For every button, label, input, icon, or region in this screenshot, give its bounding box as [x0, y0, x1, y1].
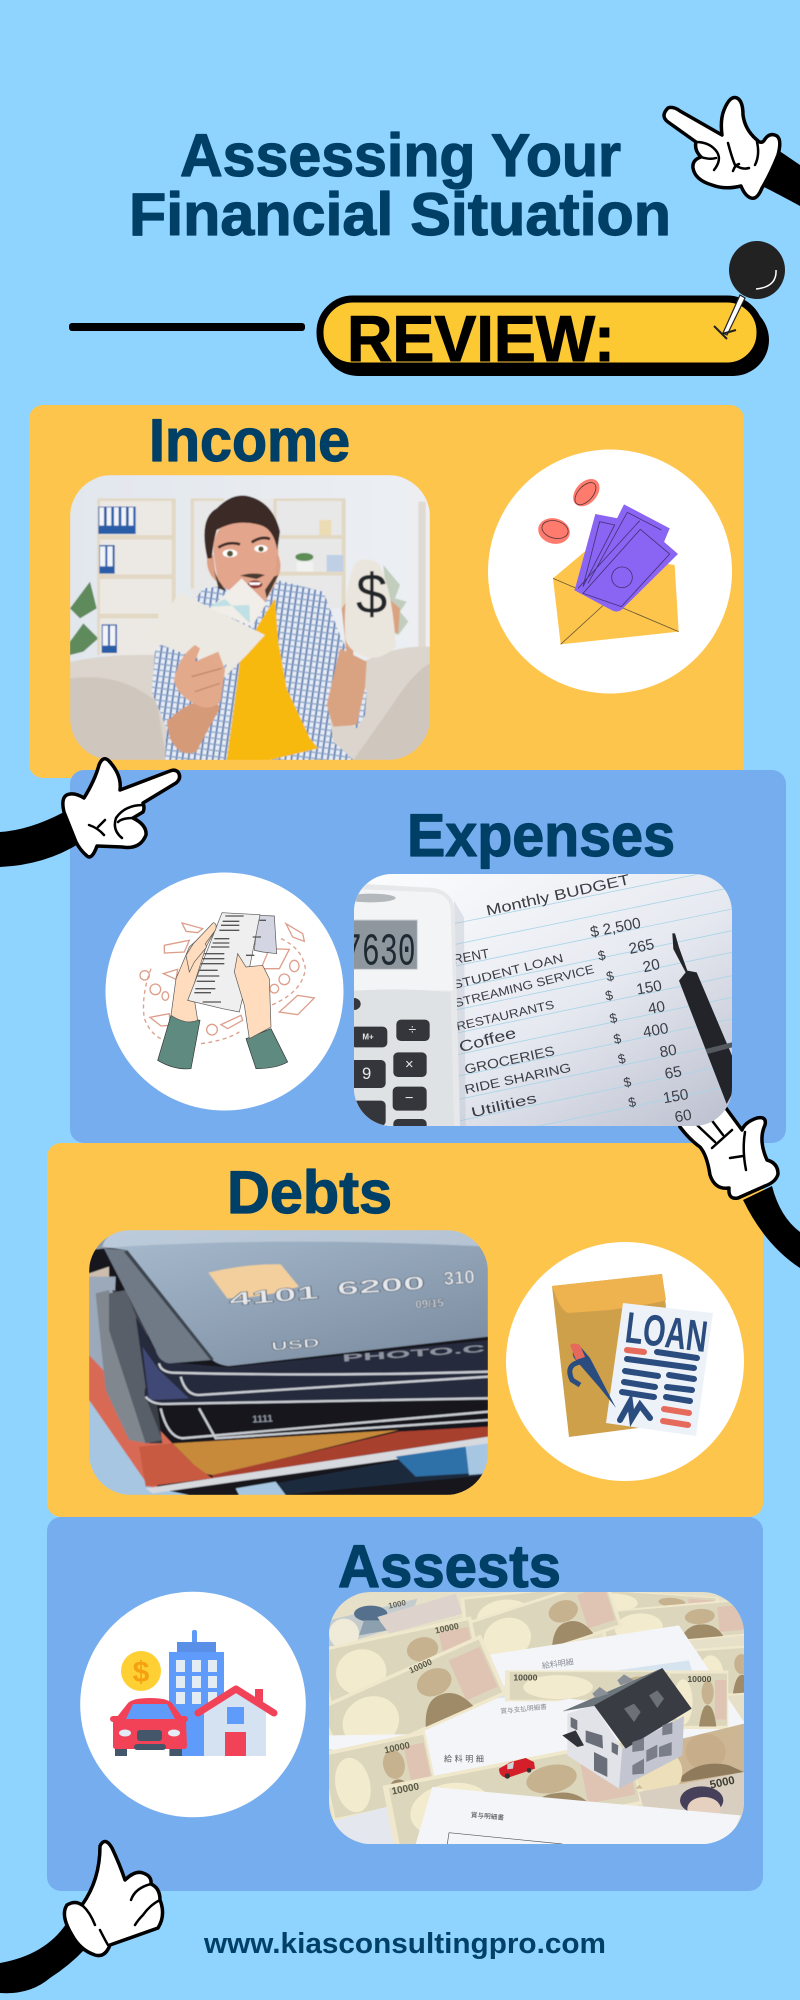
panel: debts [47, 1143, 763, 1517]
photo: yen banknotes with model house: 10000 [407, 1656, 434, 1675]
photo: monthly budget with calculator and pen: 150 [662, 1086, 690, 1107]
icon circle and loan document [506, 1242, 744, 1481]
heading: debts: Debts [227, 1159, 392, 1226]
photo: monthly budget with calculator and pen: $ [608, 1010, 619, 1026]
hand on envelope [174, 645, 225, 708]
photo: yen banknotes with model house: 10000 [383, 1740, 411, 1755]
photo: monthly budget with calculator and pen: Coffee [457, 1025, 518, 1056]
photo: yen banknotes with model house: 給料明細 [444, 1753, 487, 1764]
photo: monthly budget with calculator and pen: RENT [452, 946, 490, 967]
photo: yen banknotes with model house [329, 1592, 744, 1844]
photo: monthly budget with calculator and pen: Utilities [469, 1090, 538, 1120]
photo: monthly budget with calculator and pen: 400 [642, 1020, 670, 1041]
panel: expenses [70, 770, 786, 1143]
photo: monthly budget with calculator and pen: RESTAURANTS [455, 997, 555, 1034]
icon: assets building car house [80, 1592, 306, 1817]
photo: monthly budget with calculator and pen: ÷ [408, 1021, 416, 1037]
photo: monthly budget with calculator and pen: 7630 [344, 928, 416, 979]
photo: monthly budget with calculator and pen: $ [597, 947, 607, 964]
photo: man with bills and money bag: $ [356, 563, 387, 626]
photo: monthly budget with calculator and pen: 40 [647, 998, 666, 1018]
photo: monthly budget with calculator and pen: 65 [663, 1063, 683, 1083]
photo: monthly budget with calculator and pen: × [405, 1057, 414, 1073]
photo: yen banknotes with model house: 給料明細 [541, 1656, 574, 1672]
photo: yen banknotes with model house: 賞与明細書 [470, 1809, 505, 1822]
photo: stack of credit cards: 1111 [252, 1414, 273, 1426]
heading: income: Income [149, 407, 350, 474]
review banner: REVIEW: [347, 302, 615, 375]
photo: monthly budget with calculator and pen: $ 2,500 [589, 915, 642, 941]
icon: receipt in hands [106, 872, 344, 1110]
photo: yen banknotes with model house: 10000 [687, 1674, 712, 1684]
photo: yen banknotes with model house: 5000 [709, 1775, 736, 1792]
photo: stack of credit cards [89, 1230, 488, 1495]
photo: yen banknotes with model house: 10000 [391, 1781, 421, 1798]
photo: monthly budget with calculator and pen: 150 [635, 977, 663, 999]
photo: monthly budget with calculator and pen: $ [617, 1051, 627, 1067]
photo: monthly budget with calculator and pen: STREAMING SERVICE [453, 962, 595, 1010]
t-shirt [227, 598, 318, 760]
photo: monthly budget with calculator and pen [354, 874, 732, 1126]
face [204, 496, 281, 605]
photo: stack of credit cards: USD [271, 1335, 321, 1354]
title [129, 122, 671, 248]
envelope [160, 593, 266, 678]
panel: assets [47, 1517, 763, 1891]
photo: monthly budget with calculator and pen: 80 [658, 1042, 678, 1061]
icon: thumbs up hand [0, 1841, 163, 1993]
photo: stack of credit cards: 4101 [228, 1281, 320, 1310]
shirt [152, 580, 367, 760]
icon: assets building car house: $ [133, 1656, 150, 1689]
icon: pointing hand right [680, 1100, 800, 1268]
photo: monthly budget with calculator and pen: 265 [627, 936, 656, 958]
photo: monthly budget with calculator and pen: M+ [362, 1033, 374, 1042]
money bag [345, 559, 396, 658]
icon: pointing hand top right [664, 98, 800, 206]
photo: yen banknotes with model house: 1000 [388, 1598, 407, 1611]
icon circle and loan document: LOAN [623, 1303, 710, 1362]
photo: stack of credit cards: 6200 [336, 1272, 426, 1299]
photo: monthly budget with calculator and pen: $ [622, 1074, 633, 1090]
photo: monthly budget with calculator and pen: $ [605, 968, 616, 984]
photo: monthly budget with calculator and pen: $ [612, 1031, 623, 1047]
heading: assets: Assests [338, 1533, 561, 1600]
photo: monthly budget with calculator and pen: GROCERIES [463, 1043, 556, 1077]
arm right [327, 648, 367, 727]
photo: man with bills and money bag [70, 475, 430, 760]
review banner [320, 299, 769, 376]
heading: expenses: Expenses [407, 802, 675, 869]
pen [672, 933, 732, 1104]
title: Financial Situation [129, 181, 671, 248]
photo: monthly budget with calculator and pen: RIDE SHARING [463, 1061, 572, 1097]
photo: monthly budget with calculator and pen: 20 [641, 956, 662, 976]
photo: stack of credit cards: 09/15 [415, 1297, 444, 1311]
icon: push pin [714, 241, 785, 339]
photo: stack of credit cards: 310 [443, 1266, 475, 1289]
photo: monthly budget with calculator and pen: Monthly BUDGET [485, 872, 631, 920]
photo: monthly budget with calculator and pen: 9 [362, 1064, 371, 1083]
photo: monthly budget with calculator and pen: $ [627, 1094, 638, 1110]
photo: monthly budget with calculator and pen: $ [604, 987, 615, 1004]
photo: yen banknotes with model house: 10000 [513, 1673, 538, 1683]
photo: yen banknotes with model house: 賞与支払明細書 [500, 1701, 548, 1716]
photo: monthly budget with calculator and pen: STUDENT LOAN [451, 951, 565, 992]
photo: stack of credit cards: PHOTO.C [342, 1344, 486, 1365]
divider line [69, 323, 305, 331]
photo: yen banknotes with model house: 10000 [434, 1621, 460, 1636]
icon: pointing hand left [0, 759, 180, 867]
toy car [499, 1758, 535, 1778]
arm left [167, 700, 220, 753]
photo: monthly budget with calculator and pen: 60 [673, 1107, 693, 1126]
photo: monthly budget with calculator and pen: − [405, 1090, 413, 1106]
model house [562, 1668, 692, 1789]
panel: income [29, 405, 744, 778]
website footer: www.kiasconsultingpro.com [203, 1928, 606, 1960]
icon: envelope with cash [488, 450, 732, 694]
title: Assessing Your [180, 122, 621, 189]
calculator [354, 883, 460, 1126]
